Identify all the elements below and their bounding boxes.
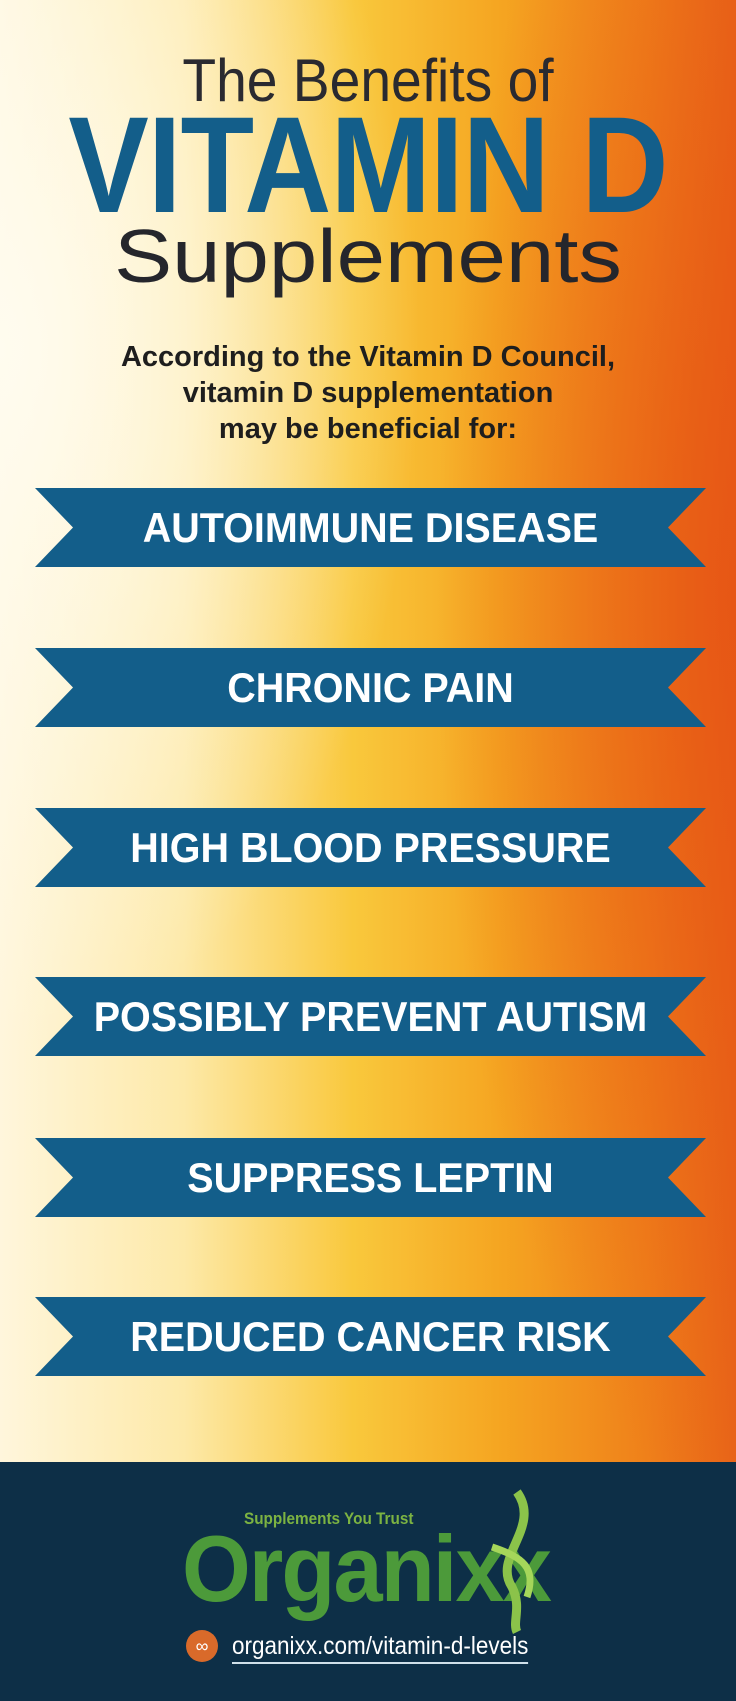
title: Supplements: Supplements	[114, 214, 622, 298]
ribbon: high blood pressure: HIGH BLOOD PRESSURE	[130, 824, 611, 871]
icon: link: ∞	[196, 1636, 208, 1656]
url text: organixx.com/vitamin-d-levels	[232, 1632, 528, 1660]
ribbon: autoimmune disease	[35, 488, 706, 567]
icon: dna helix	[490, 1489, 534, 1634]
ribbon: chronic pain: CHRONIC PAIN	[227, 664, 514, 711]
footer	[0, 1462, 736, 1701]
icon: link	[186, 1630, 218, 1662]
title: The Benefits of: The Benefits of	[182, 47, 554, 114]
tagline: Supplements You Trust	[244, 1509, 413, 1528]
intro text: According to the Vitamin D Council,	[121, 341, 615, 373]
intro text: vitamin D supplementation	[183, 377, 553, 409]
ribbon: high blood pressure	[35, 808, 706, 887]
ribbon: possibly prevent autism	[35, 977, 706, 1056]
ribbon: autoimmune disease: AUTOIMMUNE DISEASE	[143, 504, 598, 551]
url link	[186, 1630, 528, 1664]
ribbon: reduced cancer risk	[35, 1297, 706, 1376]
intro text: may be beneficial for:	[219, 413, 517, 445]
logo: Organixx	[182, 1489, 552, 1634]
ribbon: possibly prevent autism: POSSIBLY PREVENT AUTISM	[94, 993, 647, 1040]
ribbon: reduced cancer risk: REDUCED CANCER RISK	[130, 1313, 611, 1360]
intro text	[121, 341, 615, 445]
ribbon: suppress leptin: SUPPRESS LEPTIN	[187, 1154, 554, 1201]
ribbon: chronic pain	[35, 648, 706, 727]
ribbon: suppress leptin	[35, 1138, 706, 1217]
wordmark: Organixx	[182, 1516, 550, 1621]
title: VITAMIN D: VITAMIN D	[68, 89, 668, 242]
